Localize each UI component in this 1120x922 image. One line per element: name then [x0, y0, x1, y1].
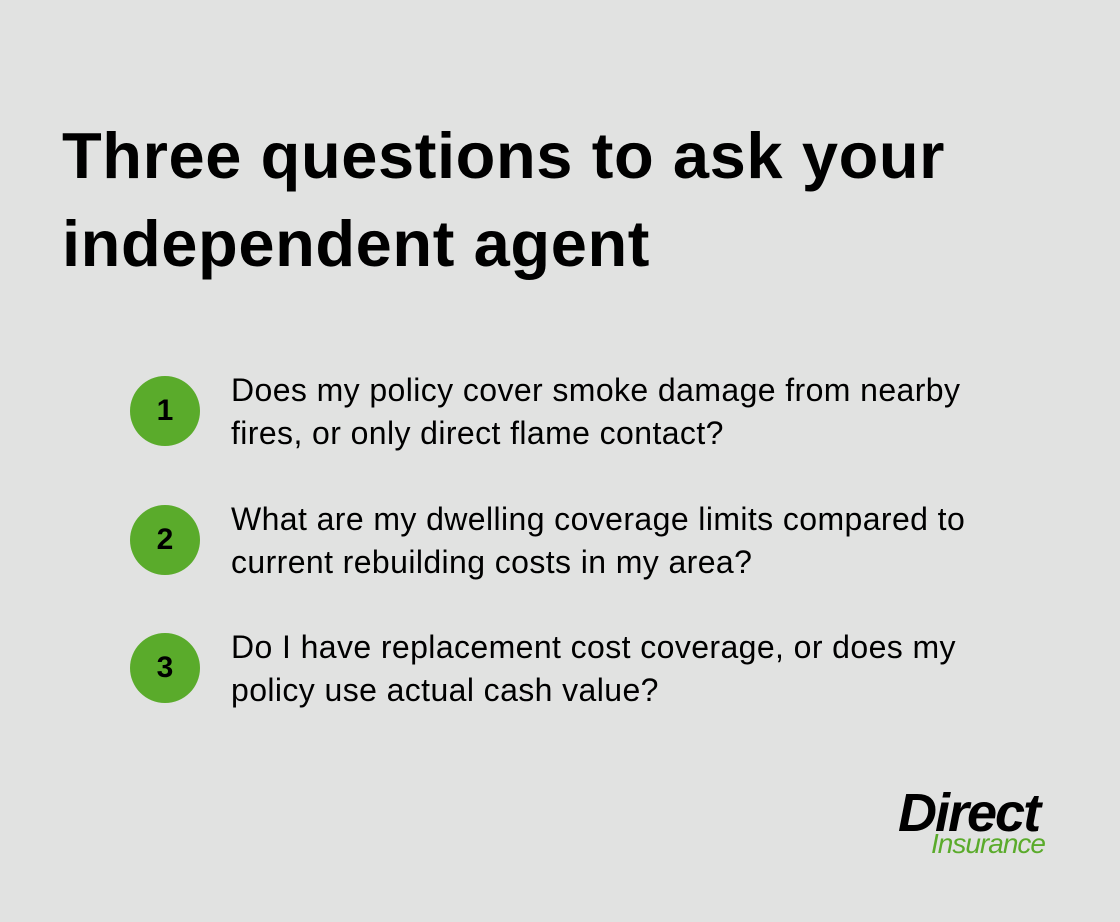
- logo: Insurance: [931, 828, 1045, 859]
- title: independent agent: [62, 207, 650, 280]
- question 1 text: [231, 372, 960, 451]
- logo: Direct: [898, 783, 1039, 843]
- number badge 2: [130, 505, 200, 575]
- number badge 1: [130, 376, 200, 446]
- question 2 text: What are my dwelling coverage limits compared to: [231, 501, 965, 537]
- number badge 3: [130, 633, 200, 703]
- question 1 text: Does my policy cover smoke damage from nearby: [231, 372, 960, 408]
- title: [62, 119, 945, 280]
- number badge 1: 1: [157, 394, 173, 427]
- item 1: [130, 372, 960, 451]
- question 3 text: [231, 629, 956, 708]
- title: Three questions to ask your: [62, 119, 945, 192]
- number badge 2: 2: [157, 523, 173, 556]
- item 3: [130, 629, 956, 708]
- question 2 text: current rebuilding costs in my area?: [231, 544, 752, 580]
- number badge 3: 3: [157, 651, 173, 684]
- question 1 text: fires, or only direct flame contact?: [231, 415, 724, 451]
- question 3 text: policy use actual cash value?: [231, 672, 659, 708]
- item 2: [130, 501, 965, 580]
- question 3 text: Do I have replacement cost coverage, or does my: [231, 629, 956, 665]
- question 2 text: [231, 501, 965, 580]
